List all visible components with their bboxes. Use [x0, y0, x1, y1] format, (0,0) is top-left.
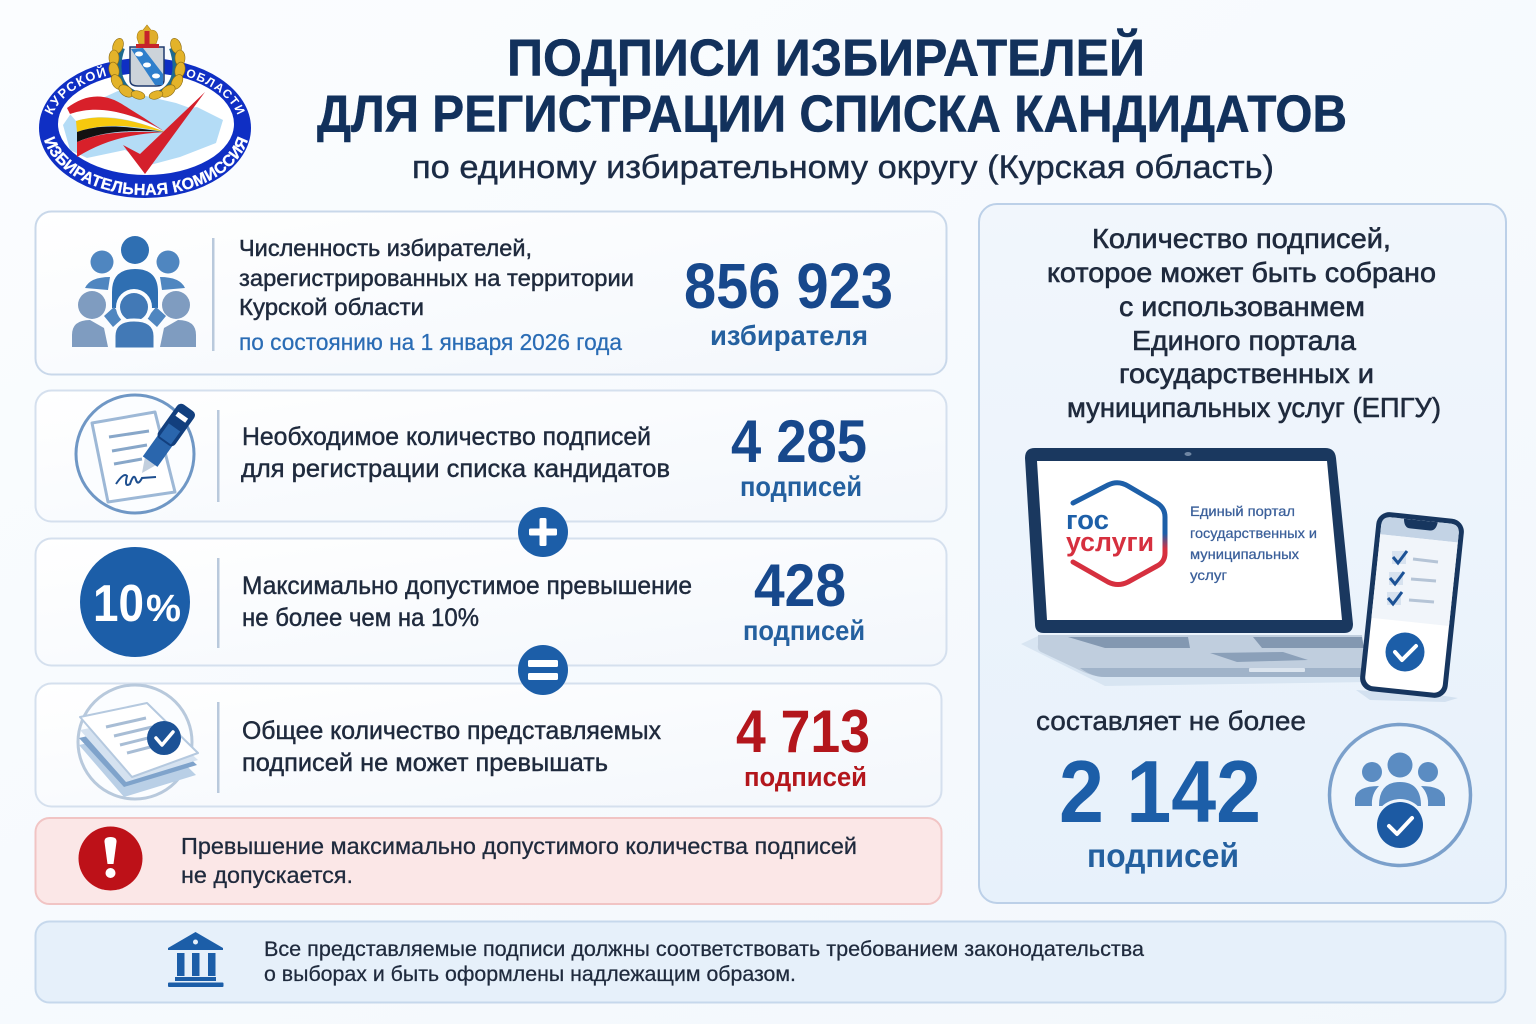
icon: exclamation mark	[78, 826, 142, 890]
required signatures description: Необходимое количество подписей	[242, 423, 651, 451]
logo: Gosuslugi hexagon	[1066, 483, 1165, 584]
total description	[242, 717, 661, 777]
warning text: не допускается.	[181, 862, 353, 888]
number: required signatures: 4 285	[731, 408, 867, 475]
voters description: Курской области	[239, 294, 424, 320]
icon: document stack	[78, 685, 198, 799]
logo: Gosuslugi hexagon: услуги	[1066, 527, 1154, 557]
footer text	[264, 938, 1144, 986]
unit: voters: избирателя	[710, 320, 868, 351]
logo: Kursk election commission emblem: ИЗБИРАТЕЛЬНАЯ КОМИССИЯ	[44, 136, 248, 196]
panel: EPGU signatures	[979, 204, 1506, 903]
portal caption: государственных и	[1190, 525, 1317, 541]
title line 1: ПОДПИСИ ИЗБИРАТЕЛЕЙ	[507, 28, 1145, 88]
required signatures description: для регистрации списка кандидатов	[241, 455, 670, 483]
voters description: по состоянию на 1 января 2026 года	[239, 329, 622, 355]
EPGU heading: Количество подписей,	[1092, 223, 1391, 254]
icon: group of voters	[72, 236, 196, 349]
logo: Gosuslugi hexagon: гос	[1066, 505, 1109, 535]
number: voters: 856 923	[684, 250, 893, 322]
title line 2: ДЛЯ РЕГИСТРАЦИИ СПИСКА КАНДИДАТОВ	[317, 86, 1347, 144]
portal caption: услуг	[1190, 567, 1227, 583]
excess description	[242, 572, 692, 632]
number: excess signatures: 428	[754, 552, 846, 619]
EPGU heading: которое может быть собрано	[1047, 257, 1436, 288]
EPGU heading: с использованмем	[1119, 291, 1365, 322]
number: EPGU signatures: 2 142	[1059, 742, 1261, 841]
illustration: phone with checklist	[1356, 511, 1465, 702]
panel: number of voters	[36, 212, 946, 374]
panel: law footer	[36, 922, 1506, 1002]
footer text: Все представляемые подписи должны соответствовать требованием законодательства	[264, 938, 1144, 961]
panel: warning	[36, 818, 942, 904]
panel: required signatures	[36, 390, 946, 522]
limit label: составляет не более	[1036, 706, 1306, 736]
icon: document and pen	[76, 395, 197, 513]
icon: plus	[518, 507, 568, 557]
panel: total signatures	[36, 684, 942, 806]
portal caption	[1190, 503, 1317, 583]
unit: EPGU signatures: подписей	[1087, 837, 1239, 874]
voters description	[239, 235, 634, 355]
voters description: зарегистрированных на территории	[239, 265, 634, 291]
voters description: Численность избирателей,	[239, 235, 532, 261]
unit: excess signatures: подписей	[743, 615, 865, 646]
unit: total signatures: подписей	[744, 762, 867, 792]
EPGU heading: муниципальных услуг (ЕПГУ)	[1067, 392, 1441, 423]
icon: ten percent badge: 10%	[93, 575, 181, 633]
footer text: о выборах и быть оформлены надлежащим образом.	[264, 963, 796, 986]
logo: Kursk election commission emblem	[39, 24, 251, 198]
required signatures description	[241, 423, 670, 483]
warning text	[181, 833, 857, 888]
warning text: Превышение максимально допустимого количества подписей	[181, 833, 857, 859]
panel: maximum excess	[36, 538, 946, 666]
illustration: laptop with Gosuslugi	[1021, 448, 1370, 686]
icon: equals	[518, 645, 568, 695]
subtitle: по единому избирательному округу (Курская область)	[412, 149, 1274, 185]
icon: institution building	[168, 932, 224, 987]
total description: Общее количество представляемых	[242, 717, 661, 745]
portal caption: Единый портал	[1190, 503, 1295, 519]
total description: подписей не может превышать	[242, 749, 608, 777]
logo: Kursk election commission emblem: КУРСКОЙ	[44, 65, 106, 115]
icon: verified group	[1330, 724, 1470, 866]
excess description: не более чем на 10%	[242, 604, 479, 632]
EPGU heading	[1047, 223, 1441, 423]
portal caption: муниципальных	[1190, 546, 1299, 562]
title	[317, 28, 1347, 185]
number: total signatures: 4 713	[736, 698, 870, 765]
logo: Kursk election commission emblem: ОБЛАСТИ	[186, 70, 245, 114]
EPGU heading: государственных и	[1119, 358, 1374, 389]
excess description: Максимально допустимое превышение	[242, 572, 692, 600]
unit: required signatures: подписей	[740, 471, 862, 502]
EPGU heading: Единого портала	[1132, 325, 1356, 356]
icon: ten percent badge	[80, 547, 190, 657]
